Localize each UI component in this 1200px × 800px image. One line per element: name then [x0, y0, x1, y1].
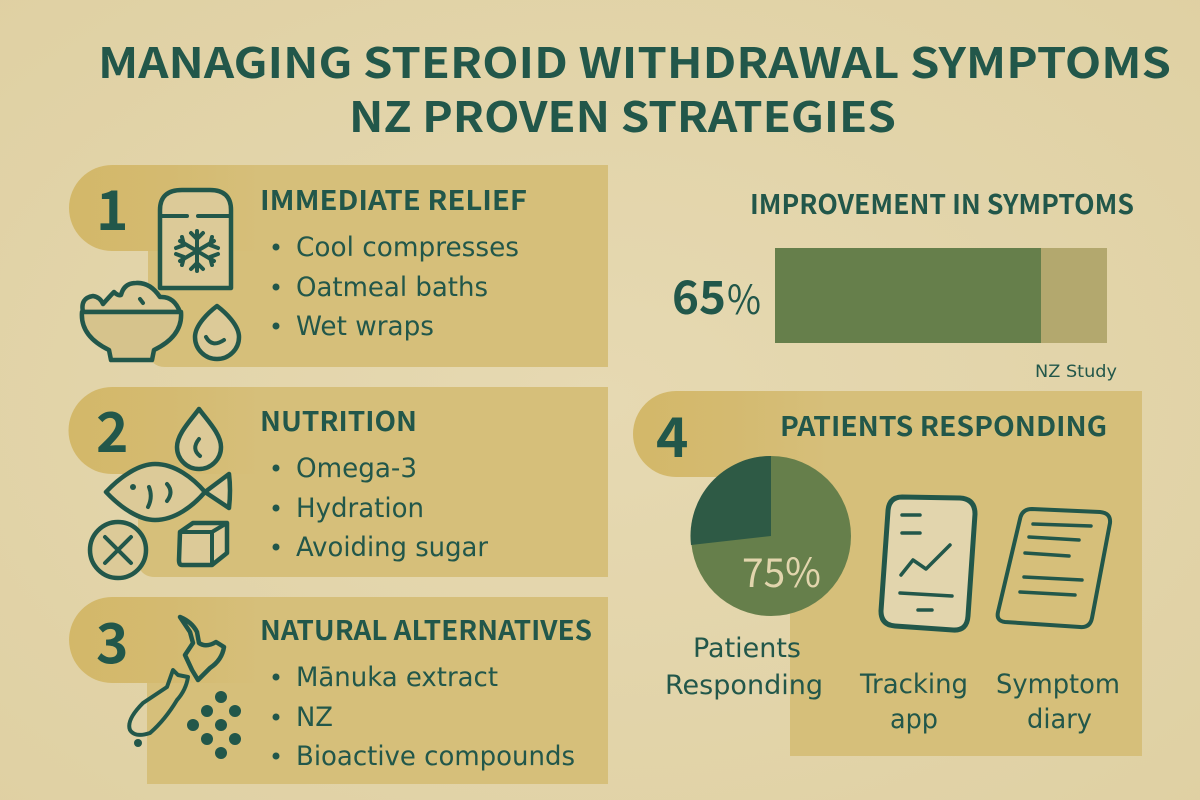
list: Cool compresses [296, 232, 519, 263]
number 4: 4 [656, 393, 688, 473]
list: Hydration [296, 493, 424, 524]
label: tracking app [859, 669, 968, 735]
list: Bioactive compounds [296, 741, 575, 772]
pie chart: 75% [690, 456, 851, 616]
panel: immediate relief [69, 165, 608, 367]
source note: NZ Study [1035, 362, 1117, 382]
number 1: 1 [96, 166, 128, 246]
list: Omega-3 [296, 453, 417, 484]
icon: crossed circle [90, 522, 146, 578]
label: patients responding: Responding [665, 670, 823, 701]
list: Mānuka extract [296, 662, 498, 693]
icon: sugar cube [179, 523, 227, 565]
label: patients responding: Patients [693, 633, 801, 664]
heading: IMMEDIATE RELIEF [260, 179, 527, 218]
icon: fish [106, 464, 230, 520]
label: patients responding [665, 633, 823, 701]
label: symptom diary [996, 669, 1120, 735]
icon: tracking app phone [881, 497, 975, 630]
number 2: 2 [96, 388, 128, 468]
icon: symptom diary [998, 509, 1110, 627]
heading: NATURAL ALTERNATIVES [260, 609, 592, 648]
list: Wet wraps [296, 311, 434, 342]
number tab 3 [69, 597, 260, 683]
panel: natural alternatives [69, 597, 608, 784]
icon: drop [177, 409, 221, 469]
list [272, 662, 575, 772]
panel: patients responding [633, 391, 1142, 756]
title: NZ PROVEN STRATEGIES [349, 84, 896, 145]
list [272, 232, 519, 342]
bar chart: 65% improvement [775, 248, 1107, 343]
icon: water drop with smile [195, 306, 239, 359]
label: symptom diary: diary [1027, 704, 1092, 735]
number 3: 3 [96, 599, 128, 679]
stat: 65% [672, 262, 761, 328]
label: symptom diary: Symptom [996, 669, 1120, 700]
list: Oatmeal baths [296, 272, 488, 303]
panel: nutrition [69, 387, 608, 578]
icon: cold pack [160, 190, 231, 288]
stat: 65%: % [727, 268, 761, 326]
icon: bioactive compound dots [187, 691, 241, 759]
list [272, 453, 489, 563]
list: NZ [296, 702, 333, 733]
title [98, 30, 1171, 145]
label: tracking app: app [890, 704, 938, 735]
list: Avoiding sugar [296, 532, 489, 563]
stat: 65%: 65 [672, 262, 726, 328]
label: tracking app: Tracking [859, 669, 968, 700]
heading: NUTRITION [260, 400, 417, 439]
number tab 2 [69, 387, 260, 474]
number tab 1 [69, 165, 260, 251]
icon: NZ map [129, 617, 224, 747]
pie value: 75% [742, 541, 821, 599]
heading: PATIENTS RESPONDING [780, 405, 1107, 444]
title: MANAGING STEROID WITHDRAWAL SYMPTOMS [98, 30, 1171, 91]
heading: improvement in symptoms: IMPROVEMENT IN SYMPTOMS [750, 183, 1134, 222]
icon: oatmeal bowl [82, 283, 181, 360]
number tab 4 [633, 391, 830, 477]
